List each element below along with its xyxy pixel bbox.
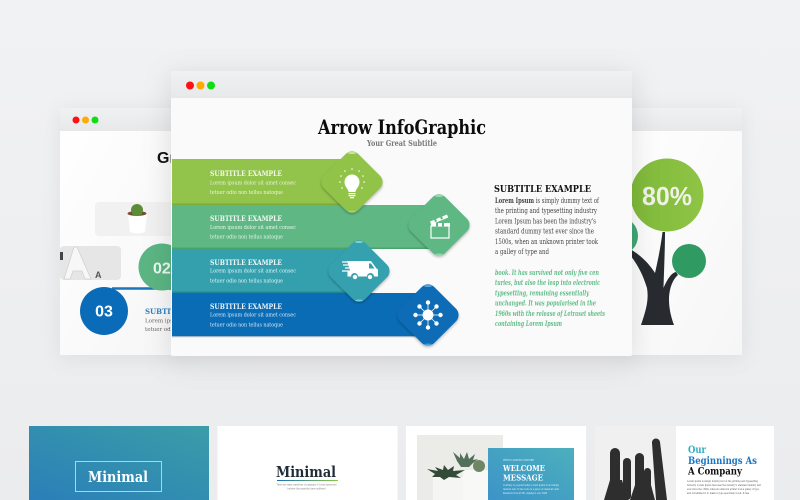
arrow row 4 [172, 293, 422, 337]
text block: description: Lorem Ipsum has been the industry's [495, 218, 596, 226]
card: welcome text: literature from 45 BC, making it over 2000 [503, 491, 547, 495]
arrow row 4: SUBTITLE EXAMPLE [210, 302, 282, 311]
card: welcome text [488, 448, 574, 500]
connector line [112, 287, 172, 290]
text block: description: book. It has survived not only five cen [495, 268, 599, 277]
text block: description: 1500s, when an unknown printer took [495, 238, 599, 246]
text block: description: standard dummy text ever since the [495, 228, 594, 236]
photo: cacti [595, 426, 676, 500]
window dots left [72, 116, 98, 124]
heading: our beginnings: Our [688, 444, 706, 456]
card: welcome text: random text. It has roots in a piece of classical Latin [503, 487, 559, 491]
panel: left background window [60, 108, 186, 355]
arrow row 2: tetuer odio non tellus natoque [210, 234, 283, 240]
window dots main [186, 82, 215, 90]
arrow row 2: SUBTITLE EXAMPLE [210, 214, 282, 223]
thumbnail: welcome message [406, 426, 586, 500]
text block: description: a galley of type and [495, 248, 549, 256]
arrow row 1: Lorem ipsum dolor sit amet consec [210, 180, 296, 186]
text block: description: typesetting, remaining essentially [495, 288, 590, 298]
panel: main window [171, 71, 632, 356]
photo: letter A [60, 246, 121, 280]
arrow row 3: tetuer odio non tellus natoque [210, 278, 283, 284]
arrow row 4: Lorem ipsum dolor sit amet consec [210, 312, 296, 318]
thumbnail: Minimal white cover [218, 426, 398, 500]
card: welcome text: WHEN LOOKING SINCERE [503, 458, 534, 462]
title: Arrow InfoGraphic [317, 116, 486, 139]
panel: right background window [600, 108, 742, 355]
text block: description: 1960s with the release of Letraset sheets [495, 309, 605, 318]
arrow row 3: SUBTITLE EXAMPLE [210, 258, 282, 267]
thumbnail: our beginnings [595, 426, 774, 500]
paragraph: our beginnings: ever since the 1500s, when an unknown printer took a galley of type [687, 487, 759, 491]
paragraph: our beginnings: Lorem Ipsum is simply dummy text of the printing and typesetting [687, 479, 758, 483]
circle 02: 02 [153, 260, 171, 278]
tree illustration [600, 158, 706, 325]
subtitle fragment: Lorem ipsum [145, 318, 182, 324]
arrow row 2 [172, 205, 434, 249]
card: welcome text: WELCOME [502, 463, 545, 473]
thumbnail: Minimal white cover: There are many variations of passages of Lorem Ipsum are [276, 482, 337, 486]
thumbnail: Minimal blue cover: Minimal [88, 468, 148, 486]
text block: description: SUBTITLE EXAMPLE [494, 184, 591, 195]
arrow row 1 [172, 159, 342, 205]
text block: description: turies, but also the leap into electronic [495, 278, 601, 287]
paragraph: our beginnings: and scrambled it to make a type specimen book. It has [687, 491, 750, 495]
arrow row 2: Lorem ipsum dolor sit amet consec [210, 225, 296, 231]
heading: our beginnings: Beginnings As [688, 455, 757, 467]
heading: our beginnings: A Company [687, 466, 743, 478]
subtitle fragment: tetuer odio [145, 327, 176, 333]
arrow row 1: SUBTITLE EXAMPLE [210, 169, 282, 178]
card: welcome text: MESSAGE [503, 472, 543, 482]
paragraph: our beginnings [687, 479, 762, 495]
arrow row 3 [172, 249, 357, 293]
partial heading left: Gr [157, 150, 176, 167]
photo: succulents [417, 435, 503, 500]
card: welcome text: Contrary to popular belief, Lorem Ipsum is not simply [503, 483, 559, 487]
arrow row 4: tetuer odio non tellus natoque [210, 322, 283, 328]
subtitle fragment [145, 307, 186, 333]
icon: network hub diamond [394, 281, 462, 349]
heading: our beginnings [687, 444, 757, 478]
text block: description: unchanged. It was popularised in the [495, 298, 596, 308]
text block: description [494, 184, 605, 328]
thumbnail: Minimal blue cover [29, 426, 209, 500]
icon: light bulb diamond [318, 148, 386, 216]
circle 03 [80, 287, 128, 335]
subtitle fragment: SUBTITLE [145, 307, 186, 316]
text block: description: the printing and typesetting industry [495, 207, 597, 215]
circle 03: 03 [95, 304, 113, 320]
text block: description: containing Lorem Ipsum [495, 319, 562, 328]
photo: cactus pot [95, 202, 175, 236]
arrow row 3: Lorem ipsum dolor sit amet consec [210, 268, 296, 274]
icon: clapperboard diamond [405, 191, 473, 259]
thumbnail: Minimal white cover: Minimal [276, 463, 336, 481]
paragraph: our beginnings: industry. Lorem Ipsum has been the industry's standard dummy text [687, 483, 762, 487]
tree illustration: 80% [642, 181, 692, 211]
text block: description: Lorem Ipsum is simply dummy text of [495, 196, 600, 205]
arrow row 1: tetuer odio non tellus natoque [210, 190, 283, 196]
thumbnail: Minimal white cover: believe the majority have suffered [288, 486, 326, 490]
photo: letter A: A [95, 270, 102, 280]
icon: delivery van diamond [325, 237, 393, 305]
subtitle: Your Great Subtitle [366, 139, 437, 149]
circle 02 [138, 244, 186, 290]
